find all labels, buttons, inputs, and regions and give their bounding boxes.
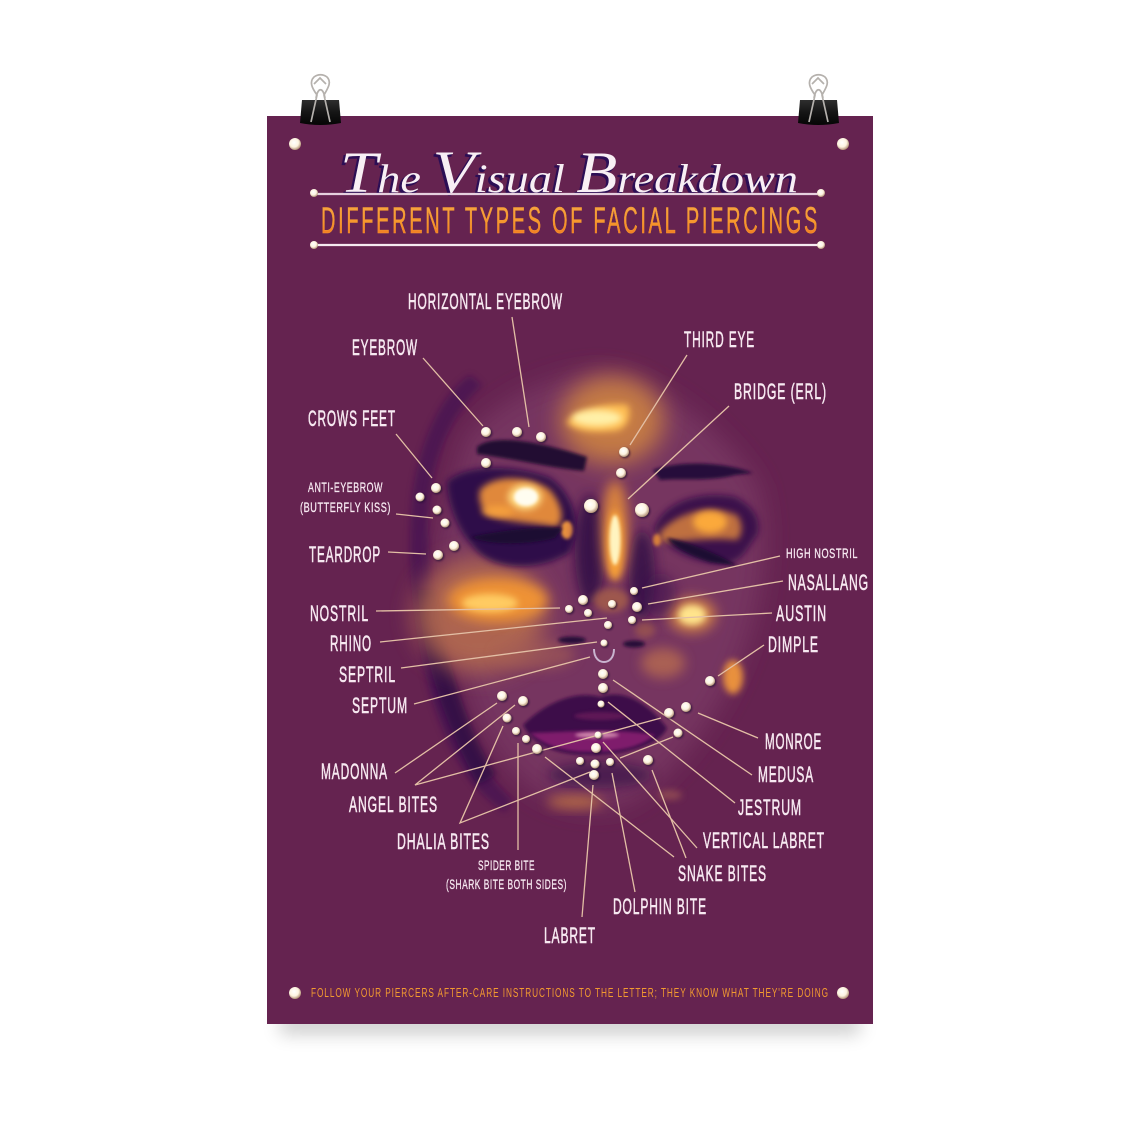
title: The Visual Breakdown: The Visual Breakdown bbox=[338, 141, 796, 207]
callout: nasallang bbox=[648, 570, 869, 604]
callout: horizontal eyebrow bbox=[408, 289, 563, 427]
callout: spider bite: SPIDER BITE bbox=[478, 857, 535, 873]
callout: angel bites: ANGEL BITES bbox=[349, 792, 438, 817]
callout: septril: SEPTRIL bbox=[339, 662, 396, 687]
callout: anti-eyebrow bbox=[300, 479, 433, 518]
callout: anti-eyebrow: ANTI-EYEBROW bbox=[308, 479, 383, 495]
callout: septum: SEPTUM bbox=[352, 693, 408, 718]
callout: snake bites bbox=[545, 737, 767, 886]
callout: madonna bbox=[321, 703, 497, 784]
callout: dolphin bite: DOLPHIN BITE bbox=[613, 894, 707, 919]
callout: eyebrow: EYEBROW bbox=[352, 335, 418, 360]
callout: eyebrow bbox=[352, 335, 483, 426]
callout: nostril: NOSTRIL bbox=[310, 601, 369, 626]
callout: angel bites bbox=[349, 705, 661, 817]
callout: dimple: DIMPLE bbox=[768, 632, 819, 657]
callout: medusa bbox=[613, 680, 814, 787]
callout: rhino bbox=[330, 618, 607, 656]
callout: vertical labret: VERTICAL LABRET bbox=[703, 828, 825, 853]
callout: dhalia bites bbox=[397, 726, 590, 854]
callout: high nostril bbox=[642, 545, 858, 588]
callout: jestrum: JESTRUM bbox=[738, 795, 802, 820]
callout: crows feet: CROWS FEET bbox=[308, 406, 396, 431]
callout: jestrum bbox=[608, 702, 802, 820]
title rules with end dots bbox=[310, 189, 825, 249]
callout: snake bites: SNAKE BITES bbox=[678, 861, 767, 886]
callout: nasallang: NASALLANG bbox=[788, 570, 869, 595]
callout: monroe: MONROE bbox=[765, 729, 822, 754]
title: The Visual Breakdown: The Visual Breakdown bbox=[340, 139, 798, 205]
poster background panel bbox=[267, 116, 873, 1024]
footer note: FOLLOW YOUR PIERCERS AFTER-CARE INSTRUCTIONS TO THE LETTER; THEY KNOW WHAT THEY'RE DOING bbox=[311, 986, 829, 1000]
binder clip: right bbox=[798, 75, 839, 125]
callout: horizontal eyebrow: HORIZONTAL EYEBROW bbox=[408, 289, 563, 314]
callout: labret: LABRET bbox=[544, 923, 596, 948]
callout: dimple bbox=[718, 632, 819, 676]
callouts: labels and leader lines bbox=[300, 289, 869, 948]
callout: third eye bbox=[630, 327, 755, 445]
callout: dhalia bites: DHALIA BITES bbox=[397, 829, 490, 854]
poster drop shadow bbox=[280, 1014, 860, 1034]
callout: austin bbox=[642, 601, 827, 626]
callout: labret bbox=[544, 785, 596, 948]
callout: anti-eyebrow: (BUTTERFLY KISS) bbox=[300, 499, 391, 515]
callout: dolphin bite bbox=[612, 773, 707, 919]
callout: third eye: THIRD EYE bbox=[684, 327, 755, 352]
callout: medusa: MEDUSA bbox=[758, 762, 814, 787]
callout: septril bbox=[339, 642, 597, 687]
callout: austin: AUSTIN bbox=[776, 601, 827, 626]
callout: septum bbox=[352, 657, 590, 718]
septum ring bbox=[594, 649, 614, 662]
illustration: face bbox=[410, 372, 765, 812]
callout: high nostril: HIGH NOSTRIL bbox=[786, 545, 858, 561]
poster corner studs bbox=[289, 138, 849, 999]
piercing studs bbox=[416, 427, 715, 780]
callout: bridge: BRIDGE (ERL) bbox=[734, 379, 827, 404]
callout: nostril bbox=[310, 601, 560, 626]
callout: bridge bbox=[628, 379, 827, 499]
callout: teardrop: TEARDROP bbox=[309, 542, 381, 567]
callout: crows feet bbox=[308, 406, 432, 478]
callout: rhino: RHINO bbox=[330, 631, 372, 656]
callout: monroe bbox=[698, 713, 822, 754]
binder clip: left bbox=[300, 75, 341, 125]
callout: vertical labret bbox=[603, 742, 825, 853]
callout: spider bite: (SHARK BITE BOTH SIDES) bbox=[446, 876, 567, 892]
callout: spider bite bbox=[446, 743, 567, 892]
callout: madonna: MADONNA bbox=[321, 759, 388, 784]
